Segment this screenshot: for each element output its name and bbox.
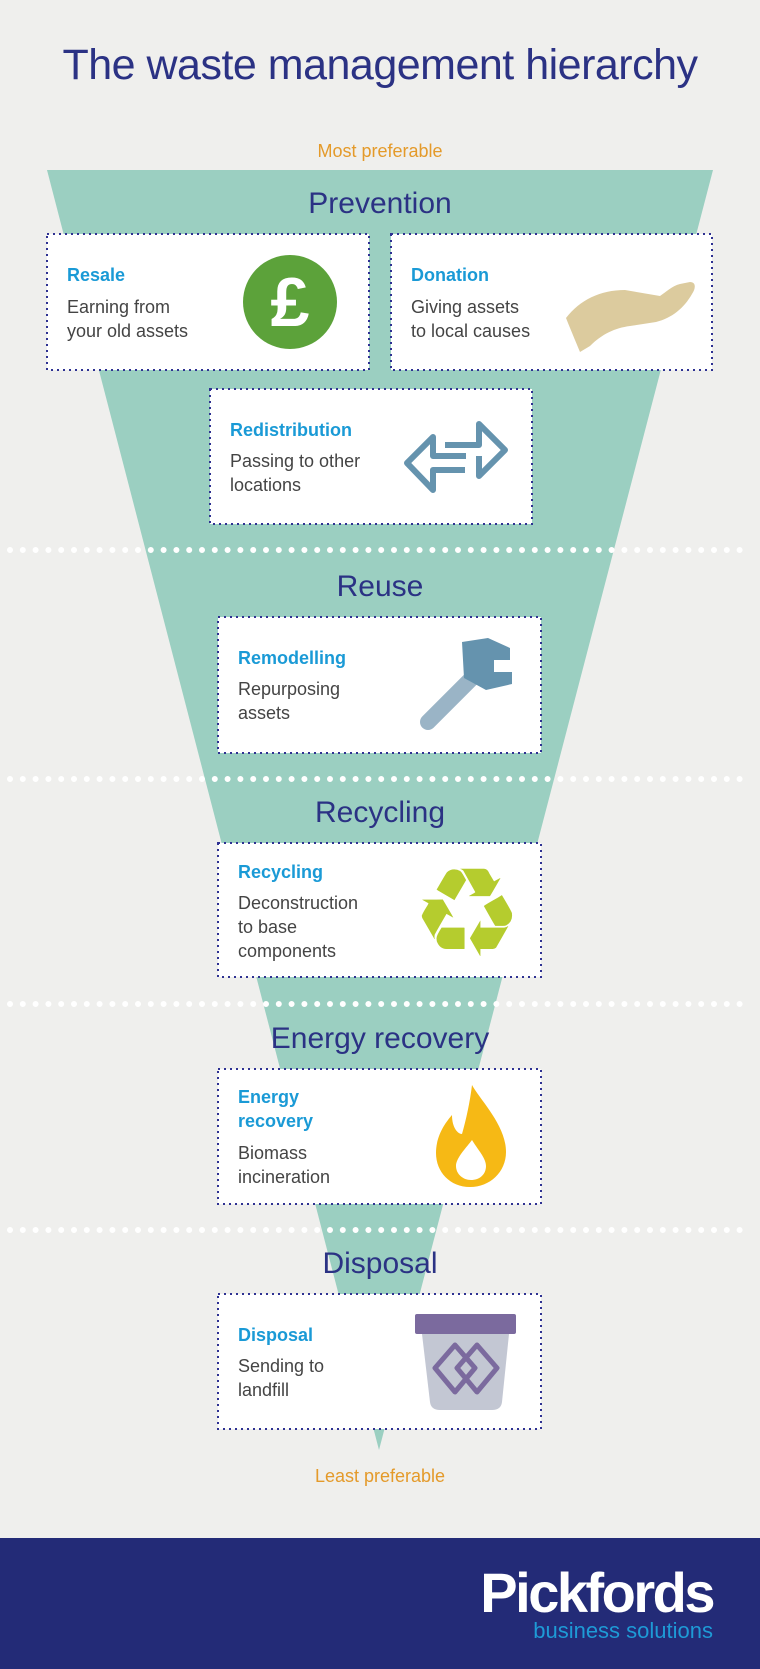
card: Remodelling: Remodelling [238,648,346,668]
card: Disposal: landfill [238,1380,289,1400]
card: Resale: Earning from [67,297,170,317]
heading: Prevention: Prevention [308,187,452,220]
card: Disposal [218,1294,541,1429]
logo: Pickfords: Pickfords [480,1561,713,1624]
logo tagline: business solutions [533,1618,713,1643]
card: Redistribution: locations [230,475,301,495]
card: Disposal: Sending to [238,1356,324,1376]
separators [10,550,752,1230]
card: Donation: Donation [411,265,489,285]
card: Resale: your old assets [67,321,188,341]
card: Donation: to local causes [411,321,530,341]
card: Recycling [218,842,541,986]
card: Energy recovery: Biomass [238,1143,307,1163]
card: Remodelling: assets [238,703,290,723]
icon: recycle: ♻ [411,842,523,986]
funnel [47,170,713,1450]
card: Energy recovery: recovery [238,1111,313,1131]
card: Donation: Giving assets [411,297,519,317]
heading: Energy recovery: Energy recovery [271,1022,489,1055]
card: Resale: Resale [67,265,125,285]
card: Redistribution [210,389,532,524]
heading: Disposal: Disposal [322,1247,438,1280]
heading: Reuse: Reuse [337,570,423,603]
card: Recycling: Recycling [238,862,323,882]
icon: bin [415,1314,516,1410]
icon: flame [436,1085,506,1187]
label: most preferable: Most preferable [317,141,443,161]
label: least preferable: Least preferable [315,1466,445,1486]
card: Energy recovery [218,1069,541,1204]
footer [0,1538,760,1669]
icon: arrows [407,424,505,490]
card: Energy recovery: Energy [238,1087,299,1107]
card: Recycling: to base [238,917,297,937]
card: Recycling: components [238,941,336,961]
card: Donation [391,234,712,370]
icon: wrench [428,638,512,722]
icon: pound coin: £ [271,263,310,341]
icon: hand [566,282,695,352]
card: Disposal: Disposal [238,1325,313,1345]
card: Resale [47,234,369,370]
card: Redistribution: Passing to other [230,451,360,471]
card: Remodelling [218,617,541,753]
card: Remodelling: Repurposing [238,679,340,699]
card: Redistribution: Redistribution [230,420,352,440]
card: Recycling: Deconstruction [238,893,358,913]
icon: pound coin [243,255,337,349]
title: The waste management hierarchy [62,41,699,89]
heading: Recycling: Recycling [315,796,445,829]
card: Energy recovery: incineration [238,1167,330,1187]
